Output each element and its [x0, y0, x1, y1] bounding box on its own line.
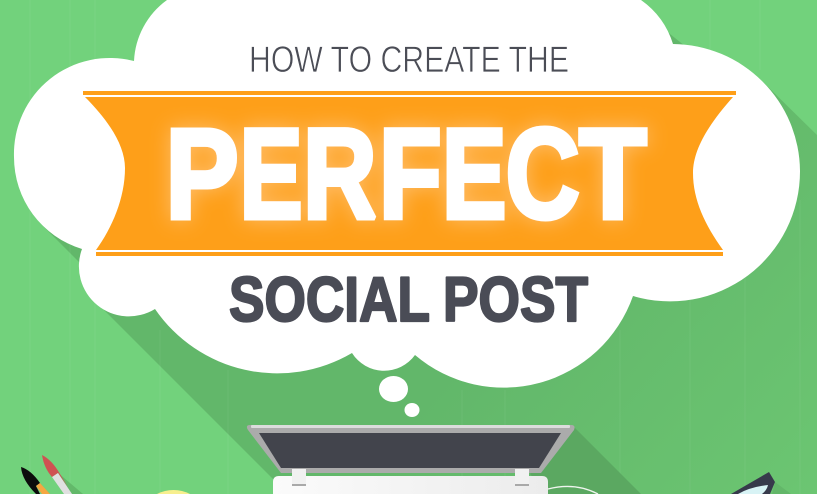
heading: perfect: C [506, 103, 580, 246]
heading: perfect: E [442, 103, 506, 246]
heading: perfect: P [166, 103, 239, 246]
thought bubble large [379, 376, 408, 402]
thought cloud [14, 0, 800, 388]
heading: social post: SOCIAL [229, 265, 430, 335]
heading: perfect: R [303, 103, 377, 246]
heading: perfect: T [579, 103, 647, 246]
heading: how to create the: HOW TO CREATE THE [249, 38, 569, 80]
heading: social post [229, 265, 588, 335]
heading: perfect [166, 103, 647, 246]
glasses [731, 472, 791, 494]
thought bubble small [404, 403, 420, 417]
yellow object [157, 490, 190, 494]
laptop [247, 425, 641, 494]
orange ribbon banner [83, 91, 736, 256]
heading: perfect: F [379, 103, 442, 246]
heading: social post: POST [443, 265, 588, 335]
heading: perfect: E [240, 103, 302, 246]
pens [21, 455, 83, 494]
